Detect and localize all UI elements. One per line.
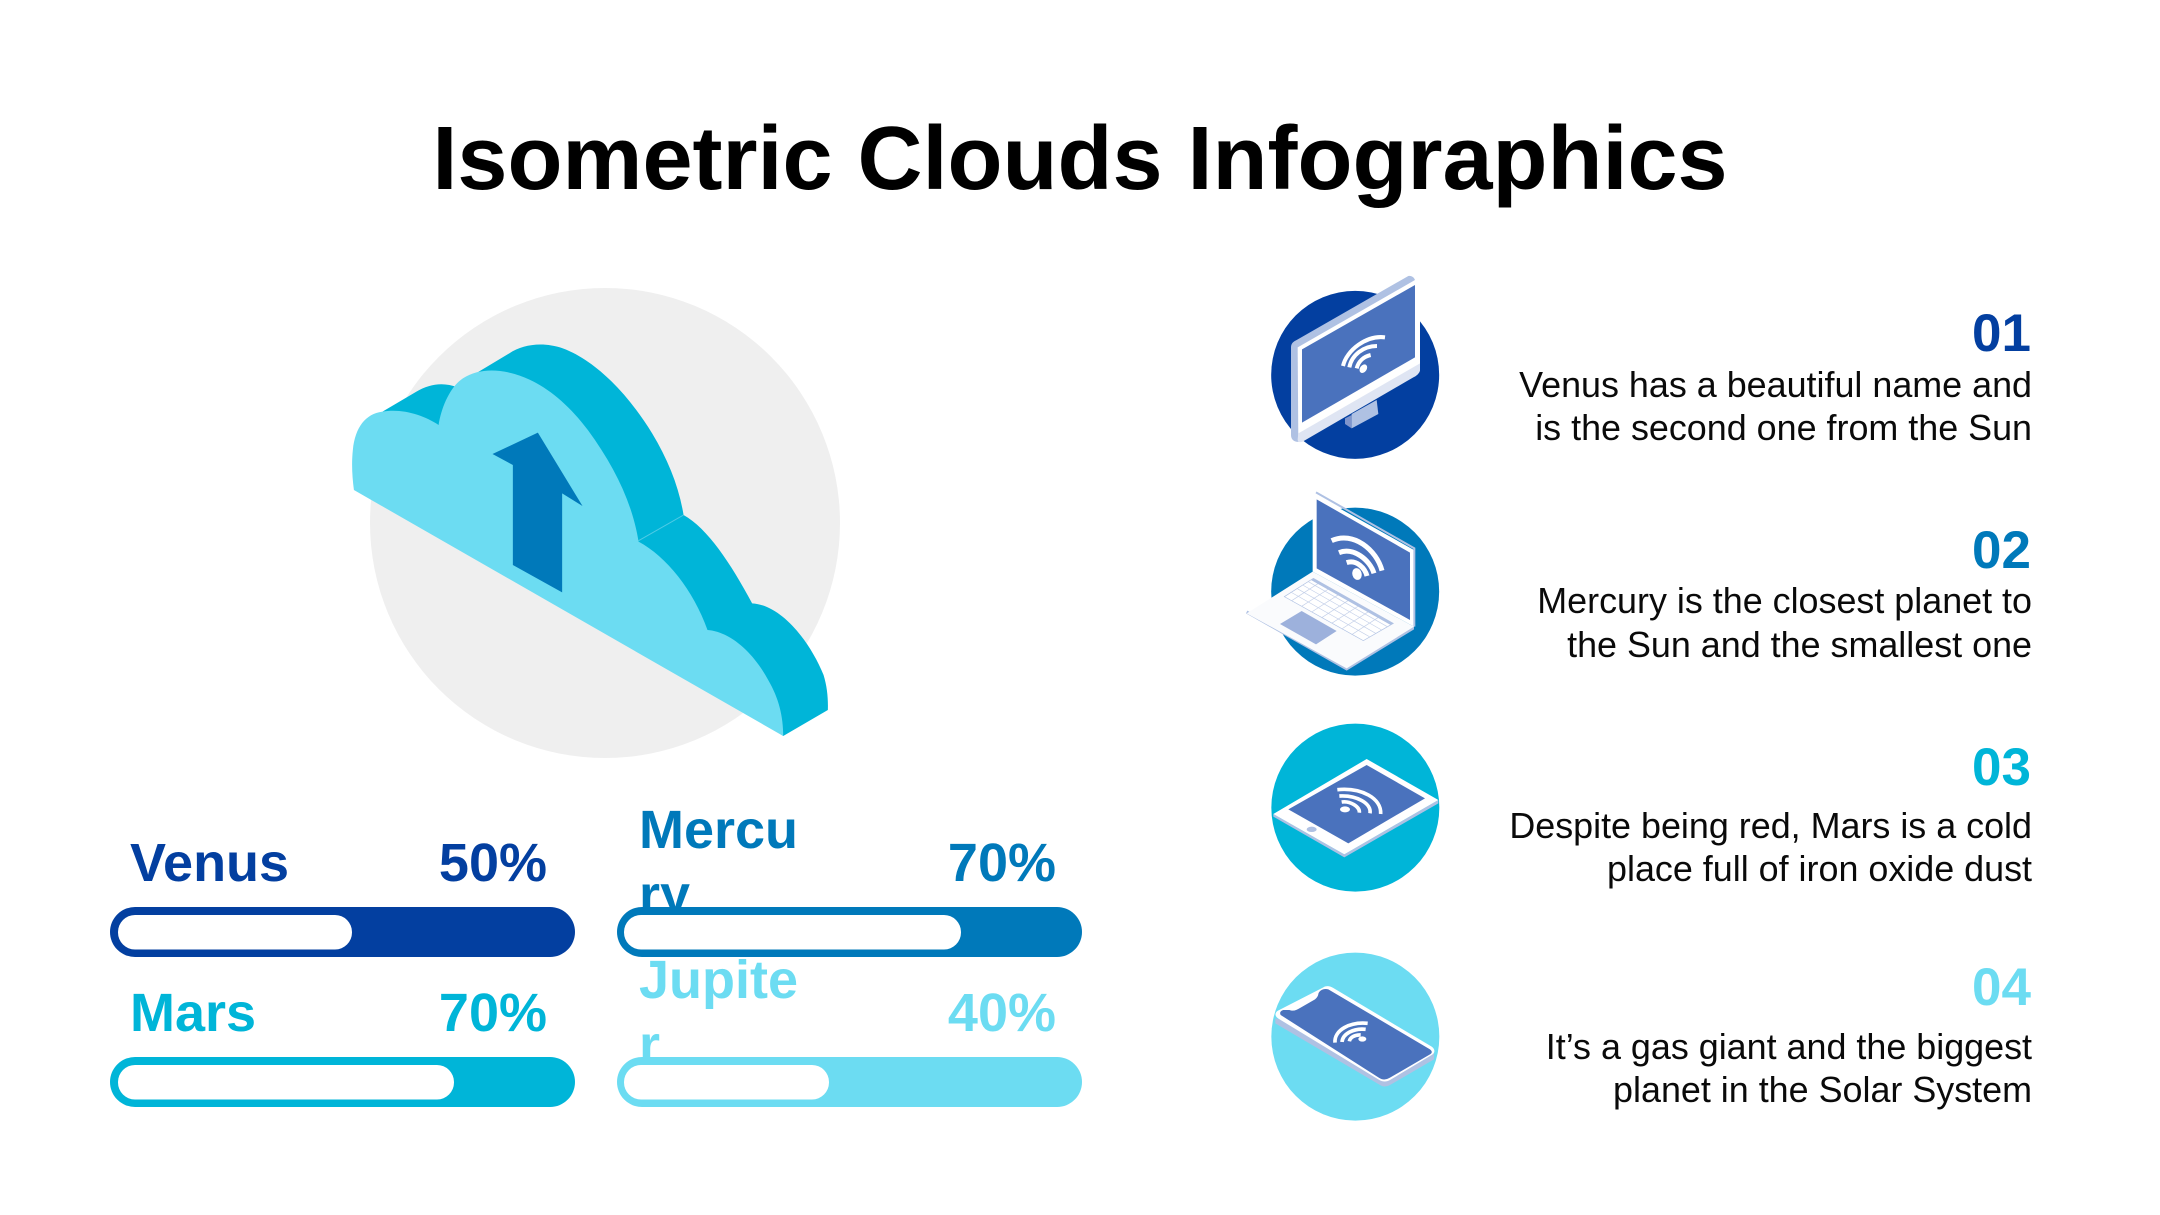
- bar Mercury: [617, 907, 1082, 957]
- item 02: [1537, 521, 2032, 665]
- progress: Jupiter: [617, 950, 1082, 1107]
- description 03: Despite being red, Mars is a cold: [1509, 806, 2032, 846]
- value 70%: 70%: [439, 983, 547, 1043]
- number 04: 04: [1972, 958, 2032, 1017]
- icon: smartphone with wifi: [1271, 953, 1439, 1121]
- progress: Mercury: [617, 800, 1082, 957]
- value 40%: 40%: [948, 983, 1056, 1043]
- description 02: Mercury is the closest planet to: [1537, 581, 2032, 621]
- icon: laptop with wifi: [1246, 492, 1439, 676]
- description 04: It’s a gas giant and the biggest: [1546, 1027, 2032, 1067]
- title: Isometric Clouds Infographics: [432, 109, 1728, 209]
- icon: isometric cloud with upload arrow: [352, 345, 828, 736]
- bar Jupiter: [617, 1057, 1082, 1107]
- item 01: [1519, 304, 2032, 448]
- bar Mars: [110, 1057, 575, 1107]
- cloud front face: [352, 370, 783, 736]
- description 02: the Sun and the smallest one: [1567, 625, 2032, 665]
- label Jupiter: Jupite: [639, 950, 798, 1010]
- icon: tablet with wifi: [1271, 724, 1439, 892]
- value 70%: 70%: [948, 833, 1056, 893]
- bar Venus: [110, 907, 575, 957]
- label Venus: Venus: [130, 833, 289, 893]
- progress: Mars: [110, 983, 575, 1107]
- number 01: 01: [1972, 304, 2031, 363]
- label Jupiter: r: [639, 1015, 660, 1075]
- description 01: is the second one from the Sun: [1535, 408, 2032, 448]
- progress: Venus: [110, 833, 575, 957]
- number 02: 02: [1972, 521, 2031, 580]
- cloud side faces: [382, 345, 828, 736]
- description 01: Venus has a beautiful name and: [1519, 365, 2032, 405]
- number 03: 03: [1972, 738, 2031, 797]
- icon: desktop monitor with wifi: [1271, 276, 1439, 459]
- item 03: [1509, 738, 2032, 889]
- label Mercury: ry: [639, 865, 690, 925]
- upload arrow: [492, 433, 582, 592]
- label Mars: Mars: [130, 983, 256, 1043]
- description 04: planet in the Solar System: [1613, 1070, 2032, 1110]
- seam between cloud lobes: [639, 515, 684, 541]
- description 03: place full of iron oxide dust: [1607, 849, 2032, 889]
- label Mercury: Mercu: [639, 800, 798, 860]
- value 50%: 50%: [439, 833, 547, 893]
- grey background circle: [370, 288, 840, 758]
- item 04: [1546, 958, 2032, 1110]
